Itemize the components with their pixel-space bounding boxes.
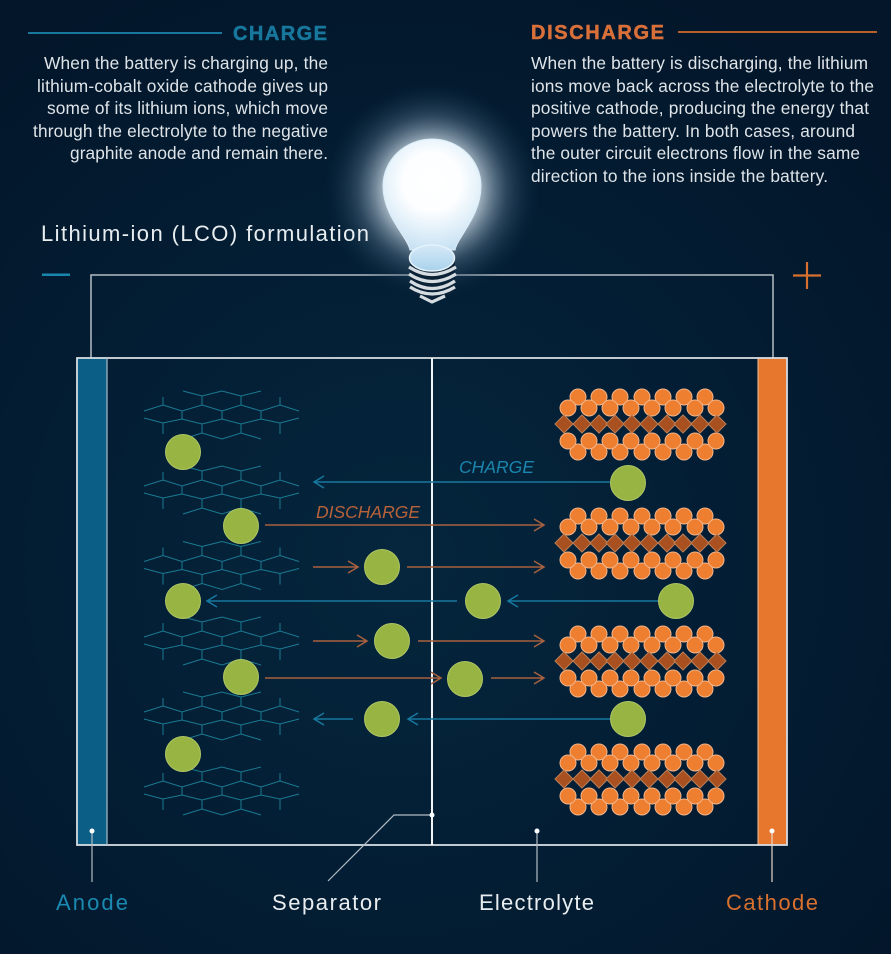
cathode bar [758,358,787,845]
plus sign [793,262,821,289]
charge description: through the electrolyte to the negative [33,121,328,141]
electrolyte label: Electrolyte [479,890,594,915]
graphite layers [144,391,299,815]
discharge description: the outer circuit electrons flow in the same [531,143,860,163]
lithium ions [166,434,694,772]
cathode pointer [770,828,774,882]
outer circuit wire [91,275,773,358]
charge description: some of its lithium ions, which move [47,98,328,118]
anode pointer [90,828,94,882]
separator pointer [328,812,434,881]
charge arrows [207,476,658,725]
separator line [431,358,433,845]
discharge description: positive cathode, producing the energy that [531,98,869,118]
battery frame [77,358,787,845]
cobalt oxide layers [555,389,726,815]
discharge heading: DISCHARGE [531,22,664,44]
discharge description: direction to the ions inside the battery. [531,166,828,186]
discharge description: ions move back across the electrolyte to the [531,76,874,96]
cathode label: Cathode [726,890,818,915]
discharge description [531,53,874,186]
charge description [33,53,328,163]
discharge description: When the battery is discharging, the lithium [531,53,868,73]
light bulb [324,82,540,303]
discharge arrow label: DISCHARGE [316,502,420,522]
charge description: lithium-cobalt oxide cathode gives up [37,76,328,96]
charge arrow label: CHARGE [459,457,534,477]
charge heading: CHARGE [233,23,327,45]
minus sign [42,274,70,276]
charge description: When the battery is charging up, the [44,53,328,73]
formulation title: Lithium-ion (LCO) formulation [41,221,369,246]
anode label: Anode [56,890,128,915]
discharge description: powers the battery. In both cases, around [531,121,855,141]
charge description: graphite anode and remain there. [70,143,328,163]
anode inner edge [106,358,108,845]
electrolyte pointer [534,828,540,882]
anode bar [77,358,107,845]
discharge arrows [265,519,544,684]
separator label: Separator [272,890,381,915]
